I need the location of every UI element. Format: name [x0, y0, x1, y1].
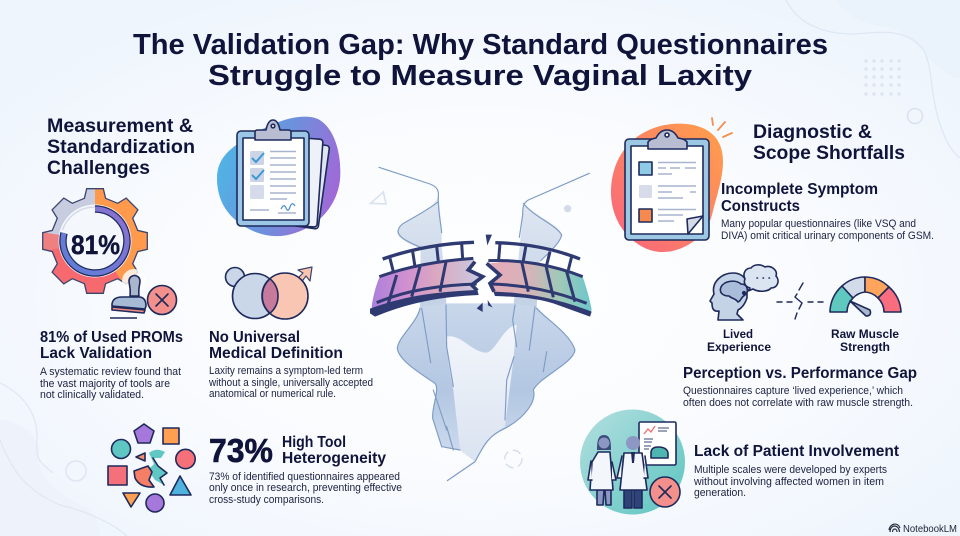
bridge right half	[487, 243, 592, 317]
text block: incomplete symptom constructs: Constructs	[721, 198, 800, 215]
title: The Validation Gap: Why Standard Questionnaires	[133, 29, 828, 61]
text block: perception vs performance: often does not correlate with raw muscle strength.	[683, 397, 913, 409]
chasm cliffs	[379, 167, 589, 481]
text block: 73 percent heterogeneity: 73% of identified questionnaires appeared	[209, 471, 400, 483]
label: raw muscle strength	[831, 327, 899, 354]
text block: 73 percent heterogeneity: 73%	[209, 432, 273, 469]
text block: incomplete symptom constructs: Many popular questionnaires (like VSQ and	[721, 218, 916, 230]
icon: overlapping gender circles	[226, 267, 312, 319]
text block: 73 percent heterogeneity: cross-study comparisons.	[209, 494, 324, 506]
text block: lack of patient involvement: generation.	[694, 487, 746, 499]
icon: head with thought bubble	[710, 265, 778, 320]
text block: lack of patient involvement: without involving affected women in item	[693, 476, 884, 488]
title	[133, 29, 828, 92]
text block: incomplete symptom constructs	[721, 181, 934, 242]
heading: measurement	[47, 115, 195, 179]
icon: clipboard with checklist	[217, 117, 340, 236]
label: raw muscle strength: Strength	[840, 340, 890, 354]
icon: gear with 81 percent	[35, 181, 176, 318]
text block: no universal definition: Medical Definition	[209, 345, 343, 362]
text block: 73 percent heterogeneity: only once in research, preventing effective	[209, 482, 402, 494]
label: lived experience	[707, 327, 771, 354]
text block: PROMs	[40, 329, 183, 401]
text block: lack of patient involvement: Lack of Patient Involvement	[694, 443, 899, 460]
panel: measurement and standardization challenges	[35, 115, 957, 535]
bridge left half	[370, 242, 483, 317]
label: raw muscle strength: Raw Muscle	[831, 327, 899, 341]
text block: 73 percent heterogeneity: Heterogeneity	[282, 450, 386, 467]
text block: incomplete symptom constructs: DIVA) omit critical urinary components of GSM.	[721, 230, 934, 242]
text block: no universal definition: anatomical or numerical rule.	[209, 388, 336, 400]
label: lived experience: Experience	[707, 340, 771, 354]
text block: no universal definition: Laxity remains a symptom-led term	[209, 365, 363, 377]
icon: clipboard with symptom list	[611, 118, 732, 252]
heading: measurement: Measurement &	[47, 115, 193, 137]
illustration: broken bridge over chasm	[370, 167, 592, 481]
heading: measurement: Challenges	[47, 157, 150, 179]
text block: perception vs performance: Questionnaires capture ‘lived experience,’ which	[683, 385, 903, 397]
heading: diagnostic	[753, 121, 905, 164]
text block: perception vs performance	[683, 365, 917, 409]
text block: 73 percent heterogeneity: High Tool	[282, 434, 346, 451]
label: lived experience: Lived	[723, 327, 753, 341]
text block: incomplete symptom constructs: Incomplete Symptom	[721, 181, 878, 198]
icon: gear with 81 percent: 81%	[71, 230, 120, 260]
text block: no universal definition	[208, 329, 373, 400]
broken dashed link	[777, 283, 823, 319]
title: Struggle to Measure Vaginal Laxity	[208, 60, 752, 92]
heading: diagnostic: Scope Shortfalls	[753, 142, 905, 164]
icon: rubber stamp	[110, 269, 146, 318]
text block: PROMs: A systematic review found that	[40, 366, 182, 378]
text block: PROMs: the vast majority of tools are	[40, 378, 170, 390]
text block: perception vs performance: Perception vs. Performance Gap	[683, 365, 917, 382]
icon: doctors with cross mark	[580, 410, 685, 514]
text block: 73 percent heterogeneity	[209, 432, 402, 506]
text block: no universal definition: without a single, universally accepted	[208, 377, 373, 389]
bridge fragments	[477, 235, 493, 312]
text block: PROMs: 81% of Used PROMs	[40, 329, 183, 346]
text block: no universal definition: No Universal	[209, 329, 300, 346]
heading: diagnostic: Diagnostic &	[753, 121, 872, 143]
icon: scattered shapes	[108, 424, 195, 512]
icon: strength gauge	[830, 277, 901, 316]
text block: lack of patient involvement: Multiple scales were developed by experts	[694, 464, 887, 476]
icon: x mark	[148, 286, 176, 314]
text block: PROMs: not clinically validated.	[40, 389, 144, 401]
text block: lack of patient involvement	[693, 443, 899, 499]
heading: measurement: Standardization	[47, 136, 195, 158]
panel: diagnostic and scope shortfalls	[580, 118, 934, 514]
text block: PROMs: Lack Validation	[40, 345, 152, 362]
